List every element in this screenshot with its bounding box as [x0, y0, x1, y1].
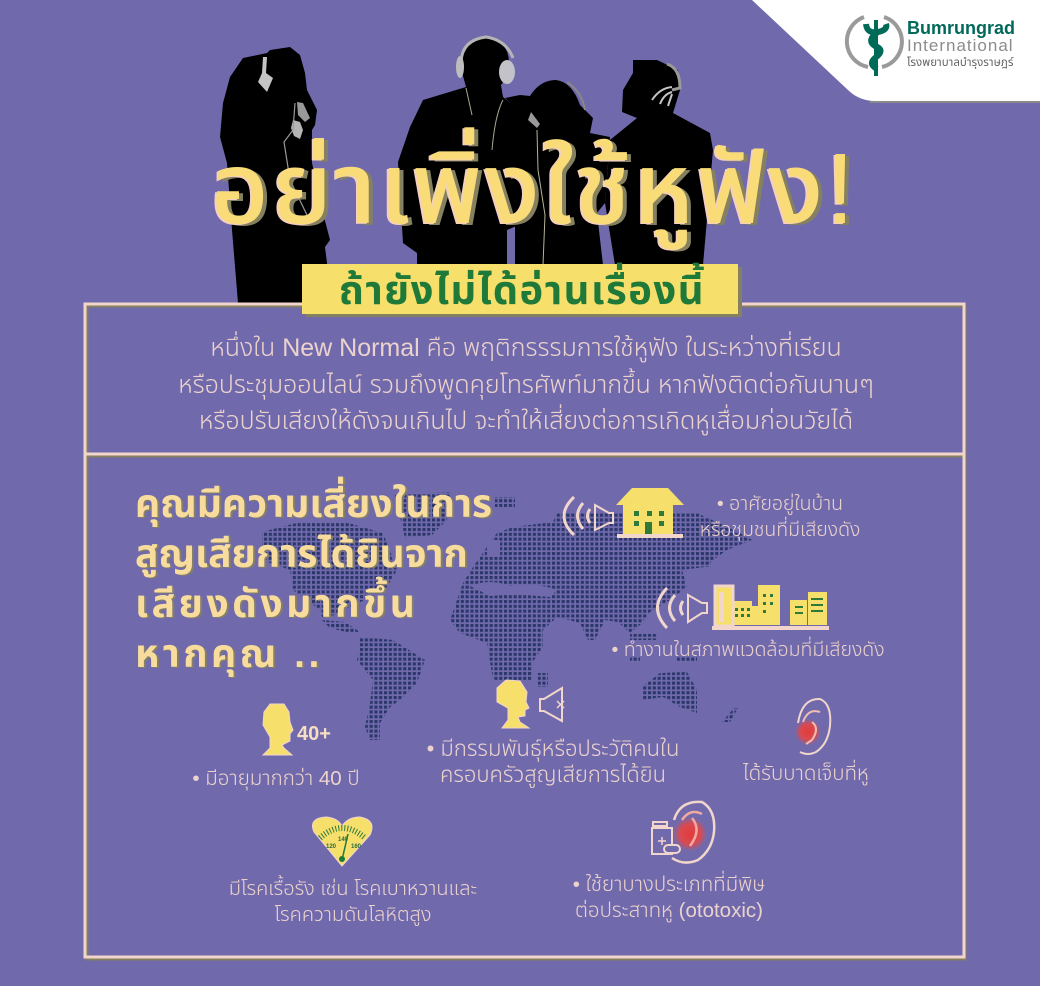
text: ototoxic medication: • ใช้ยาบางประเภทที่มีพิษ: [573, 873, 765, 896]
icon: head with 40+: 40+: [297, 723, 331, 745]
intro paragraph: หนึ่งใน New Normal คือ พฤติกรรรมการใช้หูฟัง ในระหว่างที่เรียน: [210, 334, 842, 362]
logo name: Bumrungrad: [907, 18, 1015, 38]
text: ear injury: ได้รับบาดเจ็บที่หู: [743, 762, 869, 785]
risk heading: หากคุณ ..: [135, 633, 323, 676]
text: ototoxic medication: [573, 870, 765, 922]
silhouette: man with headphones: [398, 37, 540, 265]
icon: head and muted speaker: [497, 680, 564, 728]
text: chronic disease: มีโรคเรื้อรัง เช่น โรคเบาหวานและ: [229, 878, 477, 900]
icon: heart blood-pressure gauge: 160: [351, 844, 362, 850]
icon: speaker and house: [564, 488, 684, 538]
logo corner panel: [752, 0, 1040, 103]
banner text: ถ้ายังไม่ได้อ่านเรื่องนี้: [339, 269, 705, 313]
text: genetics: [427, 736, 679, 788]
icon: heart blood-pressure gauge: [312, 817, 372, 866]
logo Thai name: โรงพยาบาลบำรุงราษฎร์: [907, 57, 1013, 69]
text: genetics: ครอบครัวสูญเสียการได้ยิน: [440, 762, 666, 787]
intro paragraph: หรือปรับเสียงให้ดังจนเกินไป จะทำให้เสี่ยงต่อการเกิดหูเสื่อมก่อนวัยได้: [199, 407, 853, 435]
icon: medicine and ear: [652, 802, 714, 863]
text: noisy home: • อาศัยอยู่ในบ้าน: [717, 493, 843, 515]
intro paragraph: [178, 331, 874, 436]
logo wordmark: [907, 18, 1015, 69]
silhouette: woman with curly hair: [220, 47, 330, 303]
text: age over 40: • มีอายุมากกว่า 40 ปี: [192, 767, 360, 790]
icon: heart blood-pressure gauge: 120: [326, 844, 337, 850]
text: noisy home: หรือชุมชนที่มีเสียงดัง: [700, 519, 860, 541]
logo emblem: [847, 17, 902, 76]
silhouette: man in profile: [605, 60, 713, 265]
dotted world map: [262, 492, 752, 740]
logo subtitle: International: [907, 36, 1014, 55]
icon: head with 40+: [263, 704, 331, 755]
text: noisy workplace: • ทำงานในสภาพแวดล้อมที่มีเสียงดัง: [611, 639, 885, 661]
text: ototoxic medication: ต่อประสาทหู (ototoxic): [575, 899, 763, 922]
icon: speaker and city: [658, 585, 829, 630]
text: genetics: • มีกรรมพันธุ์หรือประวัติคนใน: [427, 736, 679, 761]
silhouette: woman with long hair: [505, 80, 610, 265]
text: noisy home: [700, 493, 860, 541]
frame: [85, 304, 964, 957]
icon: heart blood-pressure gauge: 140: [338, 837, 349, 843]
text: chronic disease: โรคความดันโลหิตสูง: [275, 904, 431, 926]
intro paragraph: หรือประชุมออนไลน์ รวมถึงพูดคุยโทรศัพท์มากขึ้น หากฟังติดต่อกันนานๆ: [178, 370, 874, 398]
icon: injured ear: [795, 699, 830, 754]
risk heading: [135, 476, 493, 678]
risk heading: คุณมีความเสี่ยงในการ: [135, 483, 492, 526]
banner: [302, 264, 742, 317]
frame shadow: [87, 306, 965, 959]
risk heading: สูญเสียการได้ยินจาก: [135, 533, 468, 576]
text: chronic disease: [229, 875, 477, 926]
risk heading: เสียงดังมากขึ้น: [135, 583, 418, 626]
title: อย่าเพิ่งใช้หูฟัง!: [211, 133, 857, 245]
